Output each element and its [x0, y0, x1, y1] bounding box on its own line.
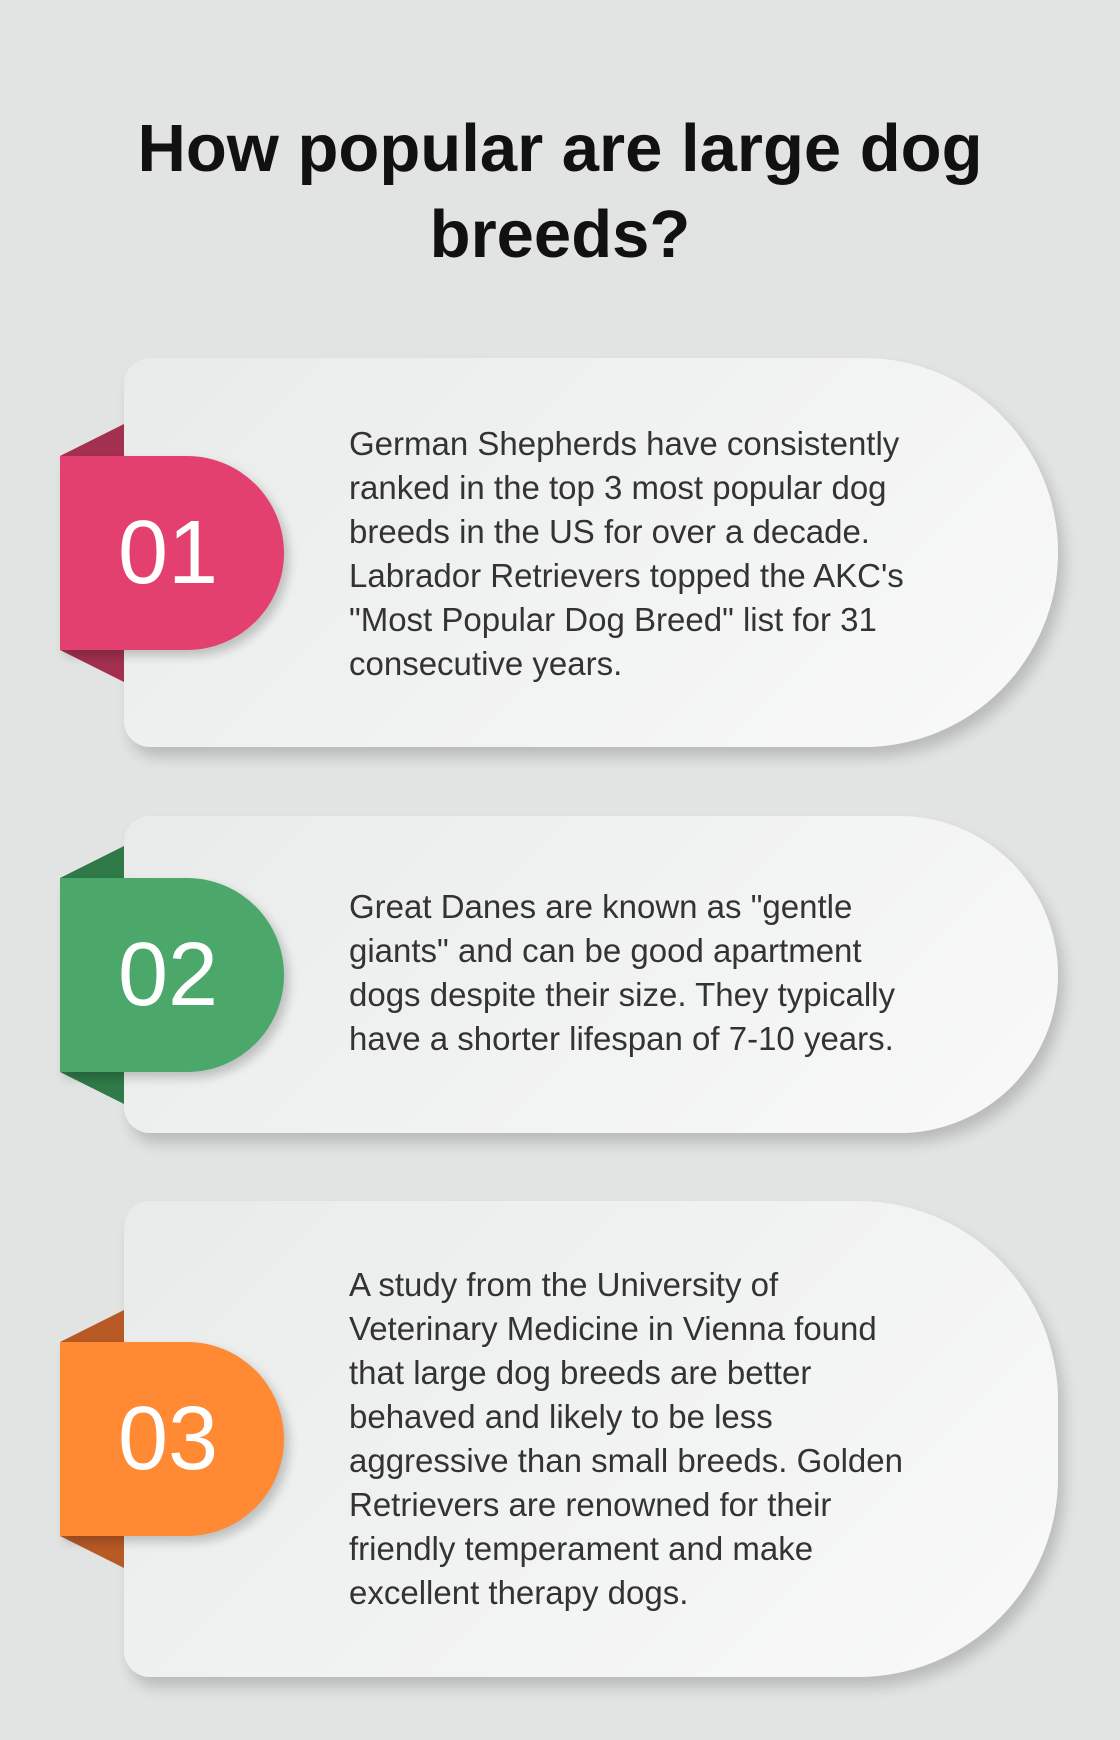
panel: card 2: [124, 816, 1058, 1133]
icon: badge 01: 01: [118, 503, 218, 603]
text: card 1: [349, 425, 904, 682]
text: card 2: have a shorter lifespan of 7-10 years.: [349, 1020, 894, 1057]
text: card 1: ranked in the top 3 most popular dog: [349, 469, 887, 506]
panel: card 3: [124, 1201, 1058, 1677]
icon: badge 02: [60, 846, 294, 1104]
text: card 3: Retrievers are renowned for their: [349, 1486, 831, 1523]
text: card 1: Labrador Retrievers topped the AKC's: [349, 557, 904, 594]
text: card 3: friendly temperament and make: [349, 1530, 813, 1567]
text: card 2: giants" and can be good apartment: [349, 932, 862, 969]
title: breeds?: [430, 197, 690, 272]
icon: badge 02: 02: [118, 925, 218, 1025]
text: card 3: that large dog breeds are better: [349, 1354, 811, 1391]
panel: card 1: [124, 358, 1058, 747]
text: card 2: dogs despite their size. They typically: [349, 976, 895, 1013]
text: card 3: A study from the University of: [349, 1266, 778, 1303]
text: card 3: excellent therapy dogs.: [349, 1574, 688, 1611]
text: card 1: "Most Popular Dog Breed" list for 31: [349, 601, 877, 638]
text: card 3: Veterinary Medicine in Vienna found: [349, 1310, 877, 1347]
text: card 3: [349, 1266, 903, 1611]
text: card 1: consecutive years.: [349, 645, 622, 682]
title: How popular are large dog: [137, 111, 983, 186]
text: card 1: German Shepherds have consistently: [349, 425, 899, 462]
title: [137, 111, 983, 272]
text: card 3: aggressive than small breeds. Golden: [349, 1442, 903, 1479]
icon: badge 01: [60, 424, 294, 682]
text: card 3: behaved and likely to be less: [349, 1398, 773, 1435]
icon: badge 03: [60, 1310, 294, 1568]
text: card 2: Great Danes are known as "gentle: [349, 888, 852, 925]
text: card 2: [349, 888, 895, 1057]
text: card 1: breeds in the US for over a decade.: [349, 513, 870, 550]
icon: badge 03: 03: [118, 1389, 218, 1489]
